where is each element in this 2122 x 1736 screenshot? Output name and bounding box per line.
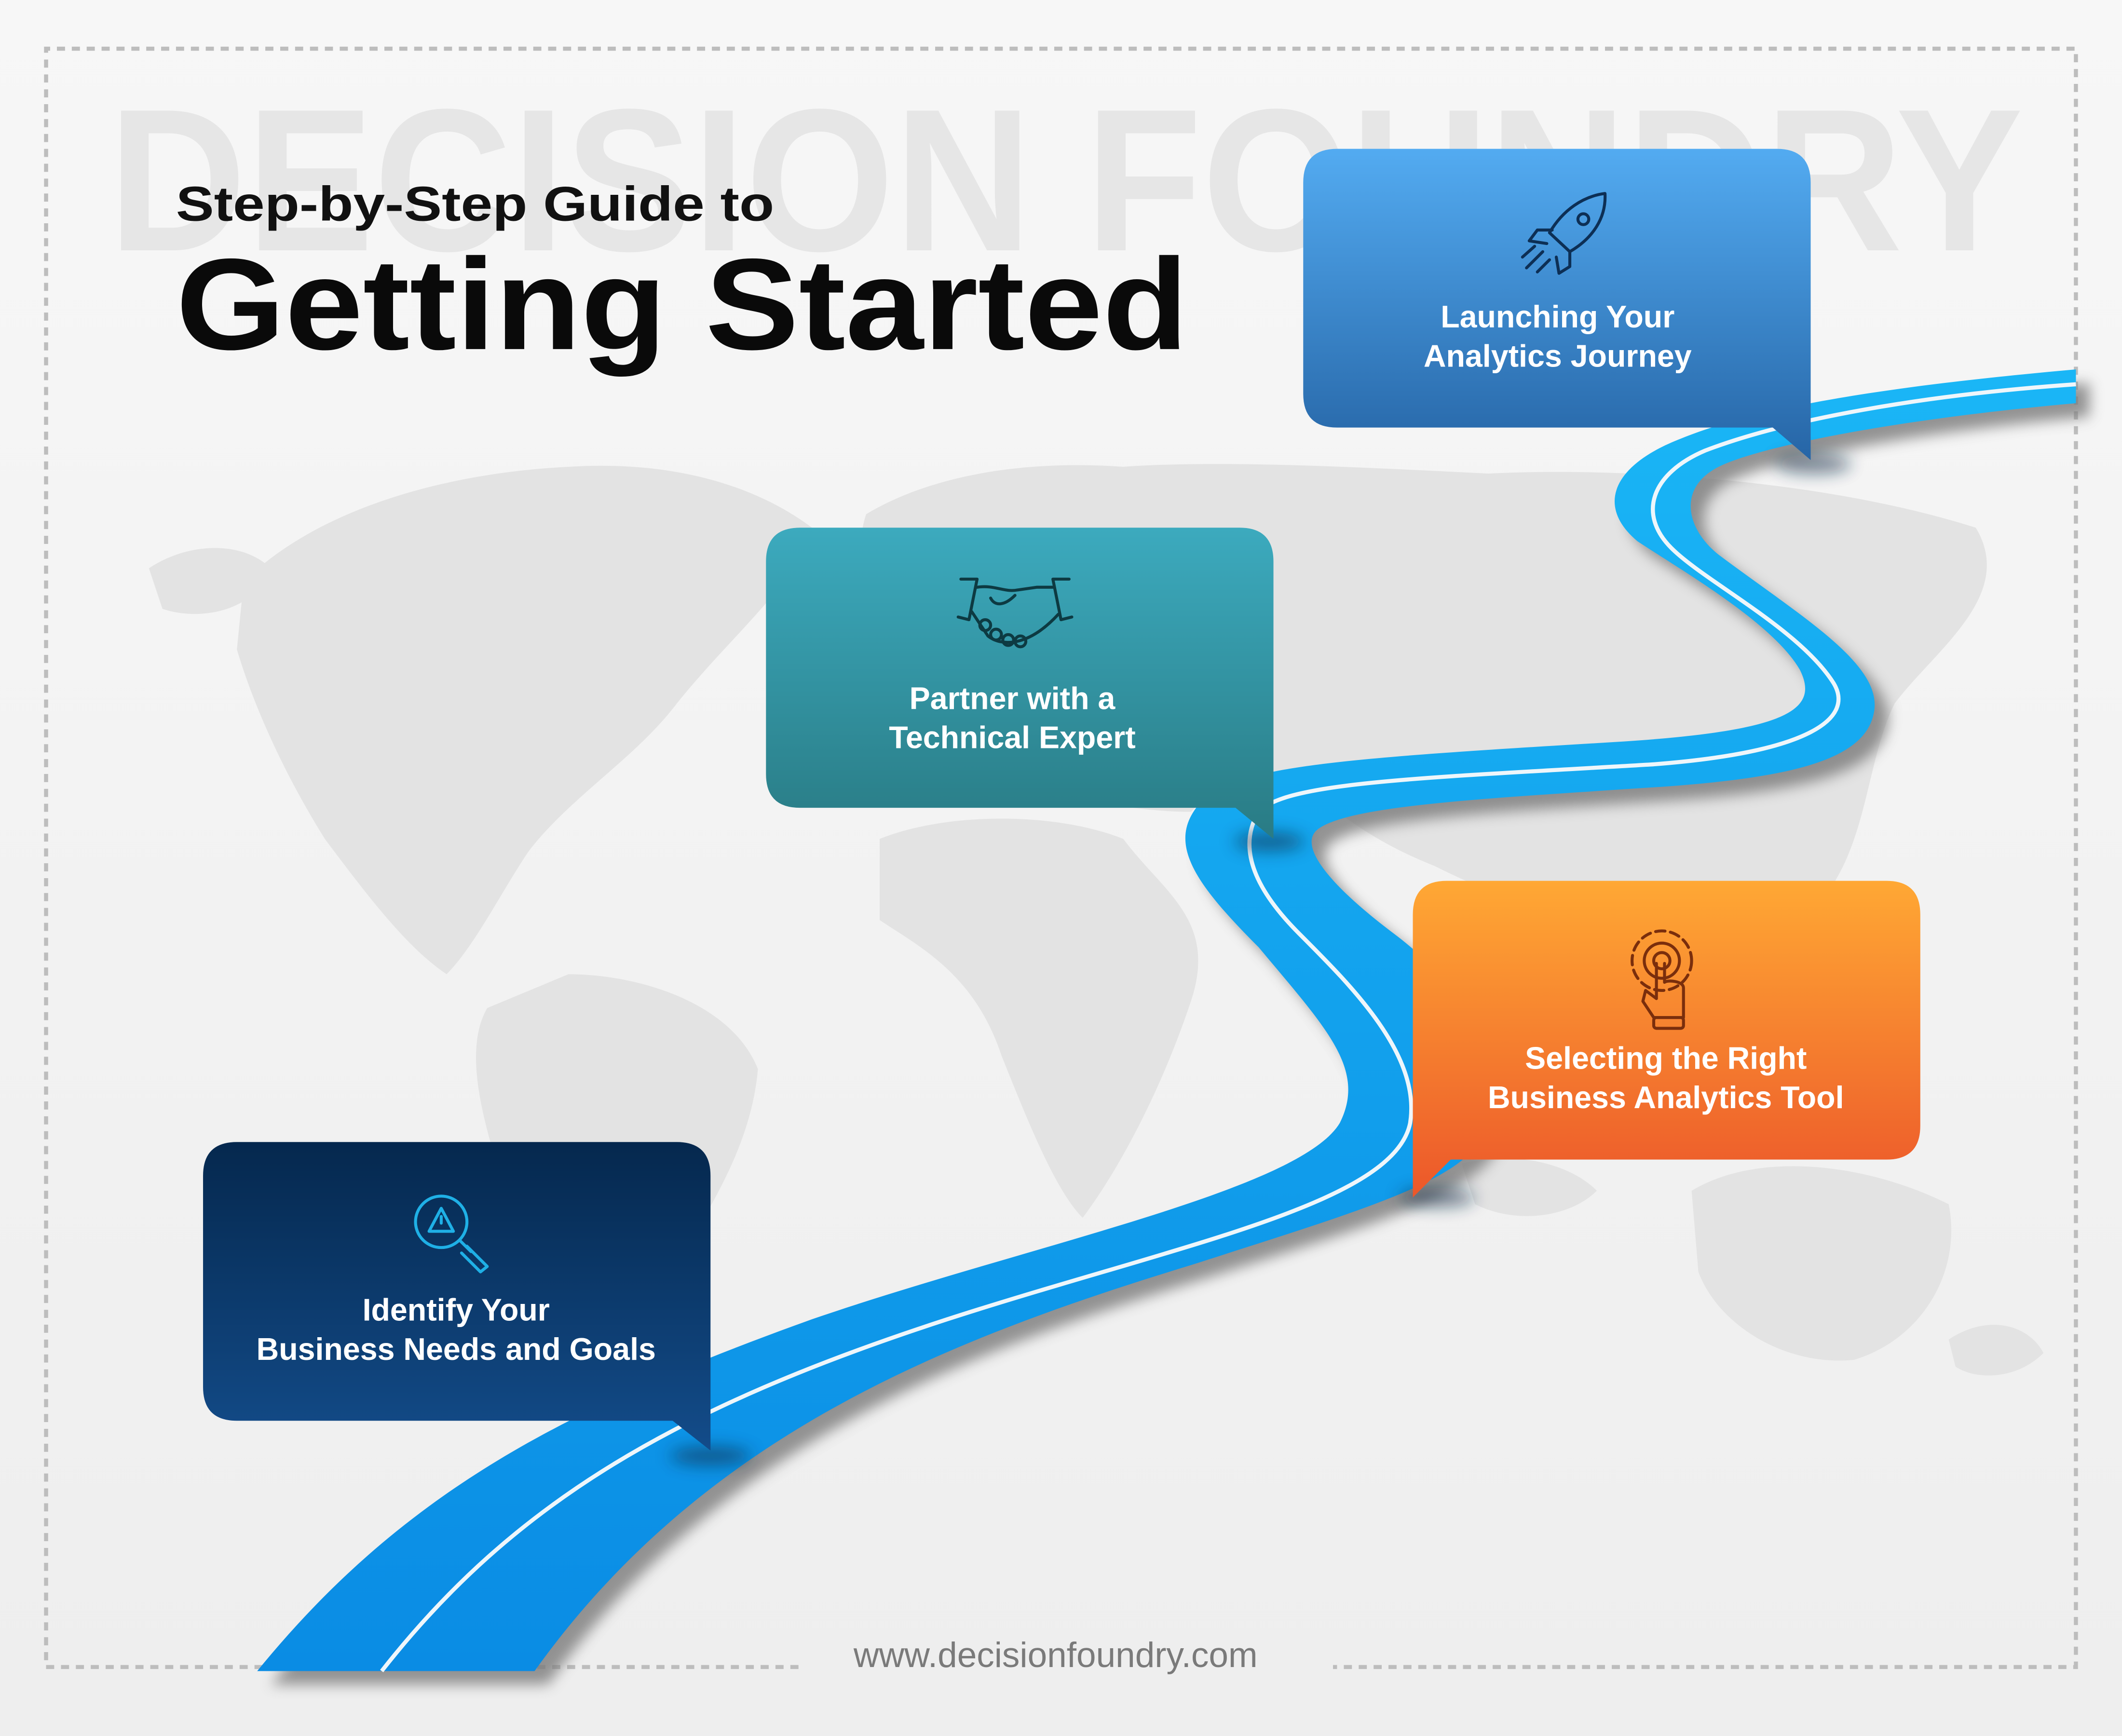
title: [176, 177, 1188, 378]
panel: partner: Technical Expert: [889, 720, 1136, 755]
panel: identify: [203, 1142, 710, 1451]
title: Step-by-Step Guide to: [176, 177, 774, 231]
title: Getting Started: [176, 232, 1188, 378]
text: selecting: Selecting the Right: [1525, 1041, 1807, 1076]
tail shadows: [670, 455, 1851, 1465]
icon: magnifier warning: [416, 1196, 487, 1272]
text: partner: Partner with a: [910, 681, 1115, 716]
road: [257, 369, 2090, 1684]
text: identify: Identify Your: [363, 1293, 550, 1328]
footer url: www.decisionfoundry.com: [853, 1636, 1258, 1675]
icon: gear with hand: [1632, 931, 1692, 1029]
icon: rocket: [1523, 193, 1605, 273]
panel: selecting: Business Analytics Tool: [1488, 1080, 1844, 1115]
panel: selecting: [1413, 881, 1920, 1197]
panel: identify: Business Needs and Goals: [257, 1332, 656, 1367]
watermark: DECISION FOUNDRY: [109, 67, 2023, 294]
panel: launching: [1303, 149, 1810, 460]
text: launching: Launching Your: [1441, 299, 1674, 334]
panel: partner: [766, 528, 1274, 839]
panel: launching: Analytics Journey: [1424, 339, 1692, 373]
icon: handshake: [958, 579, 1072, 647]
world map: [149, 464, 2043, 1434]
